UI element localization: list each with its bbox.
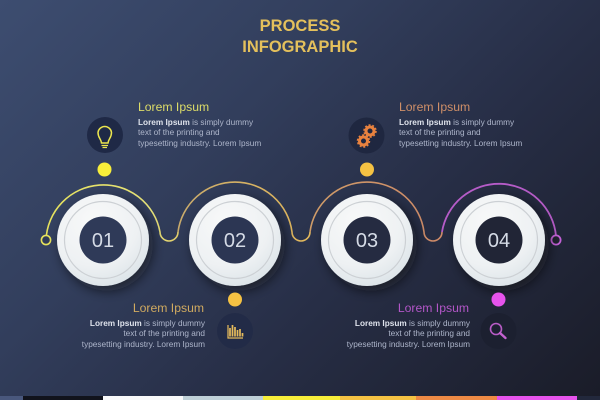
body: step 1: typesetting industry. Lorem Ipsum [138,139,261,148]
body: step 2 [82,318,205,349]
icon: gears [348,118,384,154]
connector line 1 [46,185,178,241]
dot 4 [492,292,506,306]
title: INFOGRAPHIC [242,38,358,56]
body: step 1 [138,118,261,148]
colour palette bar [0,396,600,400]
body: step 1: Lorem Ipsum is simply dummy [138,118,253,126]
heading: step 4: Lorem Ipsum [398,300,469,314]
icon: magnifier [480,313,516,349]
body: step 3 [399,118,522,148]
step 02 disc [189,194,281,286]
body: step 4: text of the printing and [388,329,470,338]
body: step 3: typesetting industry. Lorem Ipsum [399,139,522,148]
end node [551,235,561,245]
step 01 disc: 01 [92,230,114,252]
dot 2 [228,292,242,306]
connector line 2 [178,182,310,241]
step 04 disc: 04 [488,230,510,252]
body: step 3: text of the printing and [399,128,481,137]
heading: step 1: Lorem Ipsum [138,100,209,114]
dot 1 [98,162,112,176]
step 02 disc: 02 [224,230,246,252]
connector line 4 [442,184,556,236]
body: step 2: typesetting industry. Lorem Ipsum [82,340,205,349]
connector line 3 [310,182,442,241]
body: step 1: text of the printing and [138,128,220,137]
text block: step 3 [399,100,522,148]
title [242,16,358,56]
step 03 disc: 03 [356,230,378,252]
dot 3 [360,162,374,176]
icon: light bulb [87,117,123,153]
body: step 4: typesetting industry. Lorem Ipsum [347,340,470,349]
icon: bar chart [217,313,253,349]
text block: step 2 [82,300,205,349]
text block: step 1 [138,100,261,148]
body: step 3: Lorem Ipsum is simply dummy [399,118,514,126]
text block: step 4 [346,300,470,349]
body: step 4: Lorem Ipsum is simply dummy [355,318,470,328]
step 03 disc [321,194,413,286]
title: PROCESS [260,16,340,34]
step 04 disc [453,194,545,286]
body: step 2: Lorem Ipsum is simply dummy [90,318,205,328]
heading: step 2: Lorem Ipsum [133,300,204,314]
heading: step 3: Lorem Ipsum [399,100,470,114]
body: step 2: text of the printing and [123,329,205,338]
body: step 4 [346,318,470,349]
step 01 disc [57,194,149,286]
start node [41,235,51,245]
